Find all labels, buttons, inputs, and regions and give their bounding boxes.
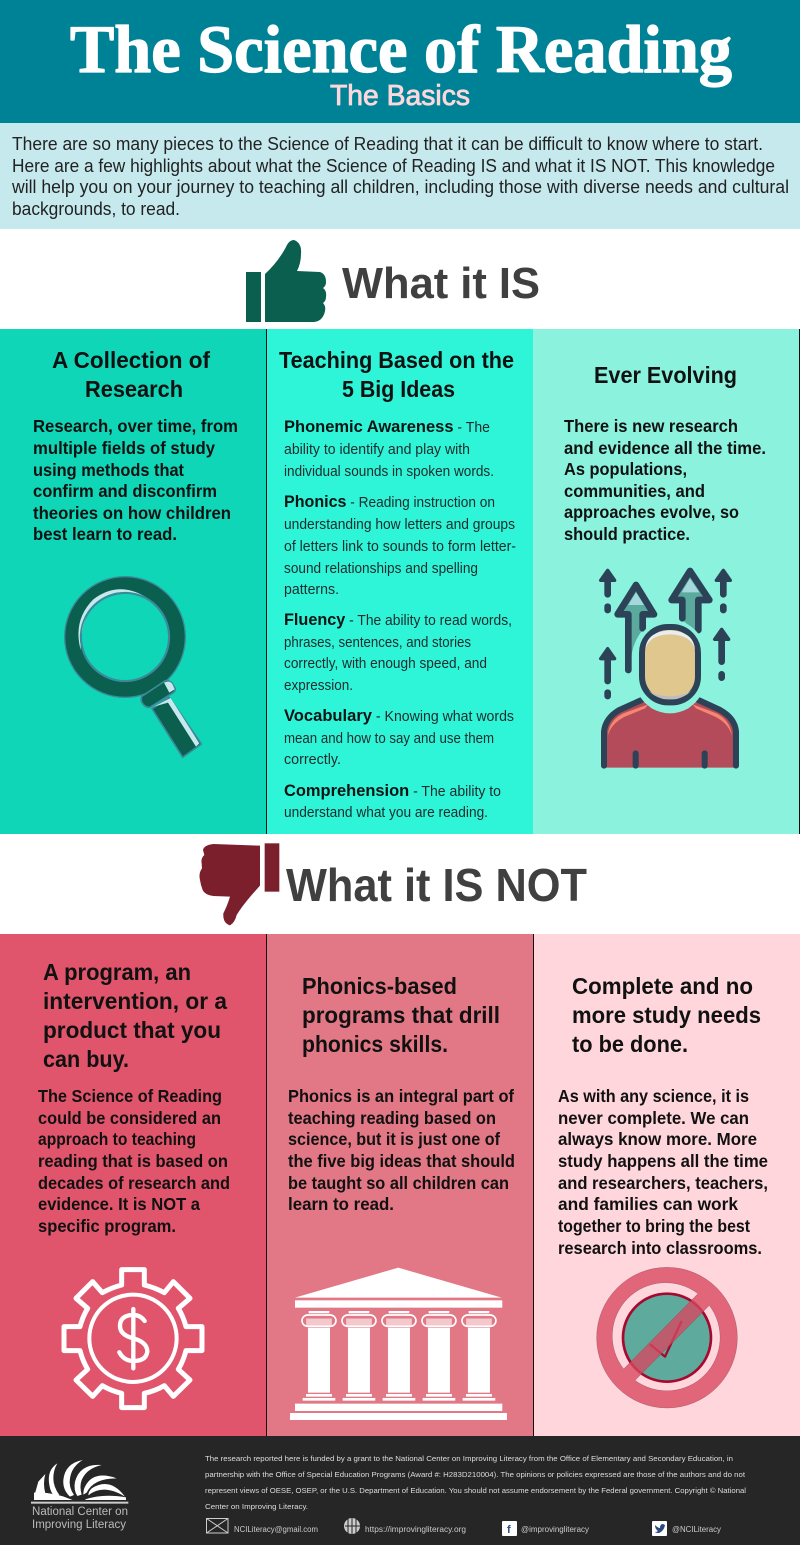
body text [38,1086,230,1236]
heading [572,973,761,1057]
text: Phonics [284,492,516,598]
text: Fluency: correctly, with enough speed, and [284,656,487,672]
body text: research into classrooms. [558,1238,762,1258]
text: Fluency: expression. [284,678,353,694]
title: The Science of Reading [70,11,732,87]
body text [564,416,766,544]
text: Phonics: of letters link to sounds to form letter- [284,539,516,555]
contact: facebook: @improvingliteracy [521,1525,589,1534]
body text: evidence. It is NOT a [38,1194,200,1214]
body text: the five big ideas that should [288,1151,515,1171]
funding disclaimer: represent views of OESE, OSEP, or the U.S. Department of Education. You should not assume endorsement by the Federal government. Copyright © National [205,1486,746,1495]
heading [52,347,210,402]
icon: magnifying glass [73,585,201,757]
heading: Research [85,376,183,402]
body text [288,1086,515,1214]
body text: As with any science, it is [558,1086,749,1106]
body text: There is new research [564,416,738,436]
panel: A Collection of Research [0,329,267,834]
header banner [0,0,800,123]
panel: Teaching Based on the 5 Big Ideas [267,329,533,834]
temple columns [302,1311,496,1401]
contact: email [206,1518,318,1534]
text: Vocabulary: mean and how to say and use them [284,731,494,747]
contact: facebook [502,1521,589,1536]
body text: Phonics is an integral part of [288,1086,514,1106]
intro text block: There are so many pieces to the Science of Reading that it can be difficult to know where to start. [12,134,763,154]
column dividers: IS [266,329,800,834]
heading: phonics skills. [302,1031,448,1057]
contact: twitter [652,1521,721,1536]
footer [0,1436,800,1545]
body text: never complete. We can [558,1108,749,1128]
heading: 5 Big Ideas [342,376,455,402]
body text: and researchers, teachers, [558,1173,768,1193]
logo: National Center on Improving Literacy [31,1460,128,1531]
logo: National Center on Improving Literacy: Improving Literacy [32,1519,126,1531]
intro text block: will help you on your journey to teaching all children, including those with diverse needs and cultural [11,177,789,197]
text: Phonemic Awareness: individual sounds in spoken words. [284,464,494,480]
panel: A program [0,934,267,1436]
intro text block: Here are a few highlights about what the Science of Reading IS and what it IS NOT. This knowledge [12,156,775,176]
body text: specific program. [38,1216,176,1236]
heading: can buy. [43,1046,129,1072]
heading text: What it IS NOT [286,859,587,911]
text: Phonics: patterns. [284,582,339,598]
heading: Teaching Based on the [279,347,514,373]
heading: A program, an [43,959,191,985]
text: Phonics: understanding how letters and groups [284,517,515,533]
body text: using methods that [33,460,184,480]
body text: Research, over time, from [33,416,238,436]
heading: to be done. [572,1031,688,1057]
text: Phonics: sound relationships and spelling [284,561,478,577]
contact: twitter: @NCILiteracy [672,1525,721,1534]
heading: product that you [43,1017,221,1043]
heading: Complete and no [572,973,753,999]
icon: classical temple [290,1268,507,1420]
intro text block: backgrounds, to read. [12,199,180,219]
body text: best learn to read. [33,524,177,544]
contact: facebook: f [507,1524,511,1536]
contact: website [344,1518,466,1534]
body text: teaching reading based on [288,1108,496,1128]
heading text: What it IS [342,259,540,308]
text: Fluency: phrases, sentences, and stories [284,635,471,651]
text: Comprehension [284,781,501,821]
heading: Ever Evolving [594,362,737,388]
body text: reading that is based on [38,1151,228,1171]
heading: Phonics-based [302,973,457,999]
section heading: What it IS [246,240,540,322]
body text: and evidence all the time. [564,438,766,458]
body text: decades of research and [38,1173,230,1193]
body text: The Science of Reading [38,1086,222,1106]
text: Phonics: Phonics - Reading instruction on [284,492,495,511]
text: Vocabulary: correctly. [284,752,341,768]
body text: always know more. More [558,1129,757,1149]
contact: website: https://improvingliteracy.org [365,1525,466,1534]
contact: email: NCILiteracy@gmail.com [234,1525,318,1534]
body text: theories on how children [33,503,231,523]
subtitle: The Basics [330,80,470,112]
heading: A Collection of [52,347,210,373]
body text: approach to teaching [38,1129,196,1149]
body text: together to bring the best [558,1216,750,1236]
body text [33,416,238,544]
body text: As populations, [564,459,687,479]
body text: approaches evolve, so [564,502,739,522]
body text: science, but it is just one of [288,1129,500,1149]
text: Comprehension: understand what you are reading. [284,805,488,821]
body text: and families can work [558,1194,738,1214]
text: Phonemic Awareness: Phonemic Awareness - The [284,417,490,436]
heading [43,959,227,1072]
body text: could be considered an [38,1108,221,1128]
body text: learn to read. [288,1194,394,1214]
icon: thumbs up [246,240,326,322]
body text: study happens all the time [558,1151,768,1171]
body text [558,1086,768,1258]
body text: confirm and disconfirm [33,481,217,501]
text: Phonemic Awareness: ability to identify and play with [284,442,470,458]
column dividers: IS NOT [266,934,534,1436]
funding disclaimer: The research reported here is funded by a grant to the National Center on Improving Literacy from the Office of Elementary and Secondary Education, in [205,1454,733,1463]
body text: should practice. [564,524,690,544]
heading: programs that drill [302,1002,500,1028]
text: Vocabulary: Vocabulary - Knowing what words [284,706,514,725]
heading [279,347,514,402]
panel: Ever Evolving [533,329,800,834]
text: Vocabulary [284,706,514,768]
funding disclaimer [205,1454,746,1511]
text: Fluency [284,610,512,694]
heading [302,973,500,1057]
funding disclaimer: partnership with the Office of Special Education Programs (Award #: H283D210004). The opinions or policies expressed are those of the authors and do not [205,1470,746,1479]
body text: be taught so all children can [288,1173,509,1193]
icon: thumbs down [199,843,279,925]
body text: multiple fields of study [33,438,215,458]
funding disclaimer: Center on Improving Literacy. [205,1502,308,1511]
intro text block [0,123,800,229]
text: Fluency: Fluency - The ability to read words, [284,610,512,629]
body text: communities, and [564,481,705,501]
text: Comprehension: Comprehension - The ability to [284,781,501,800]
logo: National Center on Improving Literacy: National Center on [32,1506,128,1518]
icon: dollar gear [64,1270,202,1408]
panel: Phonics-based programs [267,934,533,1436]
text: Phonemic Awareness [284,417,494,480]
heading: more study needs [572,1002,761,1028]
icon: prohibited check mark [597,1267,737,1408]
heading: intervention, or a [43,988,227,1014]
icon: person with rising arrows [601,570,736,768]
panel: Complete and no more study [533,934,800,1436]
section heading: What it IS NOT [199,843,587,925]
